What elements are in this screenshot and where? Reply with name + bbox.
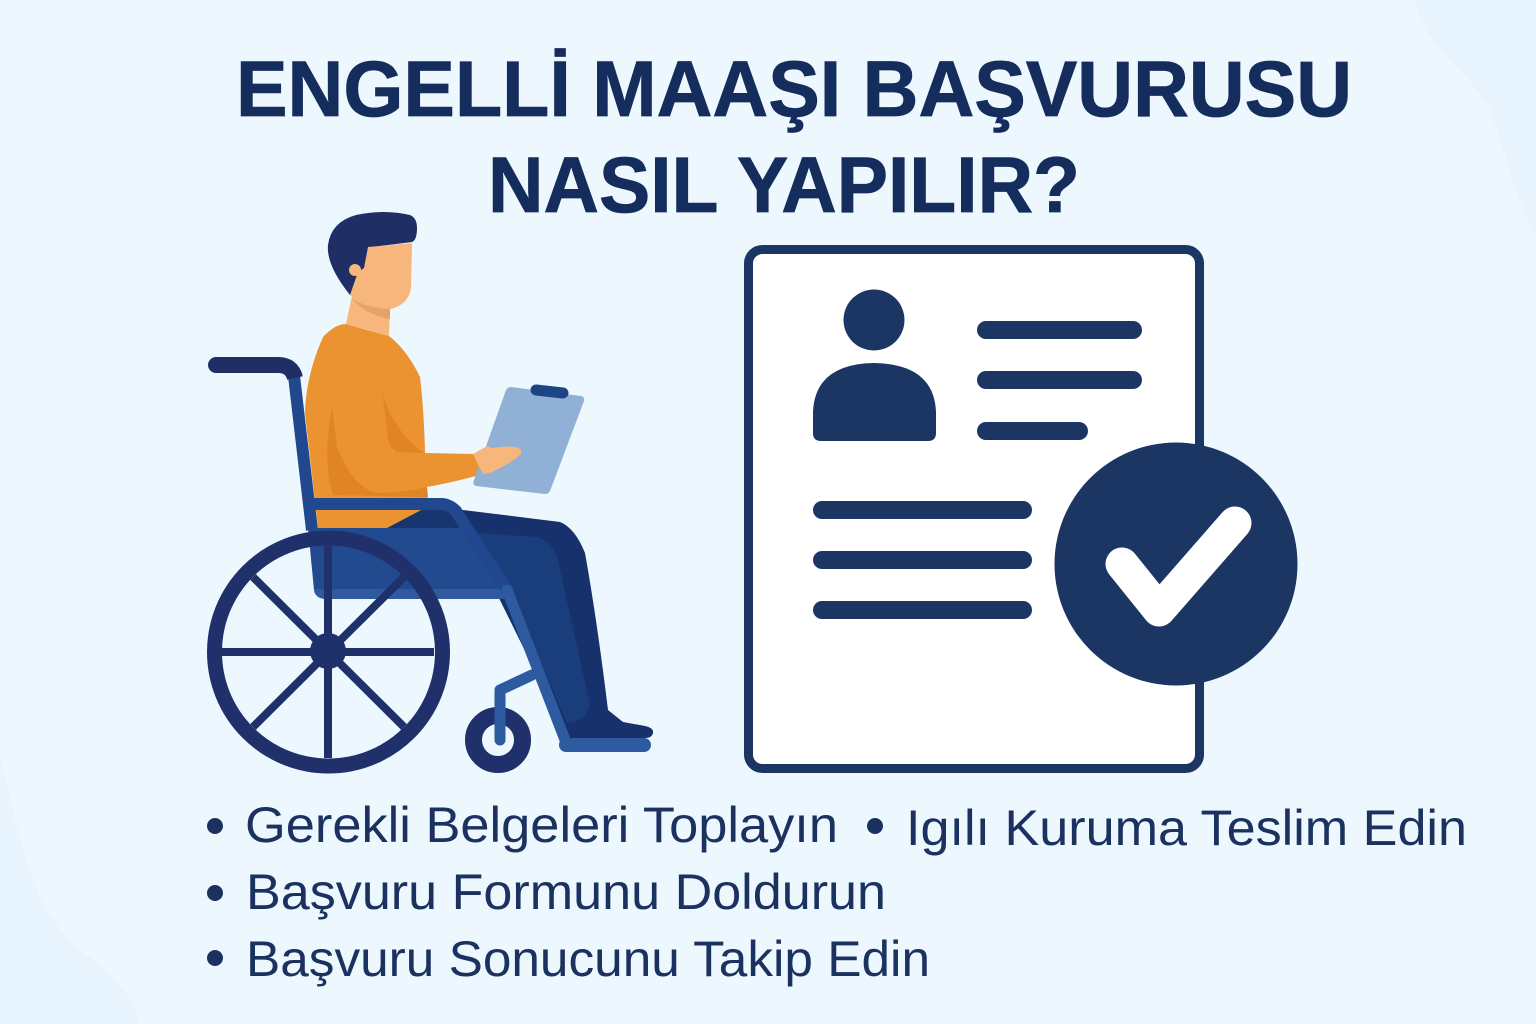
document text lines — [822, 330, 1133, 610]
title: NASIL YAPILIR? — [488, 140, 1080, 229]
step: gerekli belgeler: Gerekli Belgeleri Toplayın — [245, 797, 838, 853]
document sheet — [748, 250, 1200, 768]
icon: approval check badge — [1054, 442, 1298, 686]
step: başvuru sonucu: Başvuru Sonucunu Takip Edin — [246, 931, 930, 987]
main wheel — [214, 538, 442, 766]
document — [748, 250, 1298, 768]
wheelchair armrest and frame — [313, 504, 644, 745]
title: ENGELLİ MAAŞI BAŞVURUSU — [236, 44, 1352, 133]
title — [236, 44, 1352, 229]
caster wheel — [474, 675, 532, 764]
icon: profile avatar — [813, 290, 936, 441]
wheelchair backrest — [208, 357, 312, 530]
illustration: person in wheelchair — [208, 212, 653, 766]
step: kuruma teslim: Igılı Kuruma Teslim Edin — [906, 800, 1467, 856]
neck — [346, 296, 390, 336]
step: başvuru formu: Başvuru Formunu Doldurun — [246, 864, 886, 920]
head — [328, 212, 417, 309]
hand — [473, 446, 521, 474]
sweater — [305, 324, 483, 528]
step list — [207, 797, 1467, 987]
clipboard — [473, 387, 584, 494]
wheelchair seat — [308, 507, 510, 599]
leg and shoe — [455, 509, 653, 738]
